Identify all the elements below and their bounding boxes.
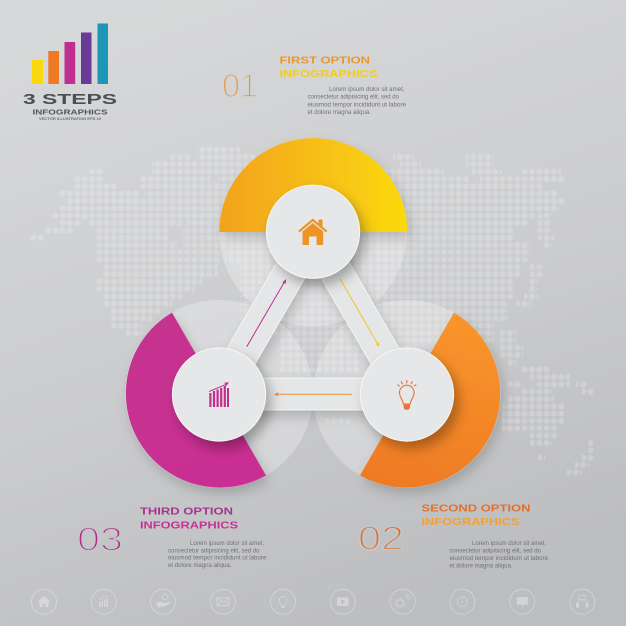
icon: banknote bbox=[330, 589, 355, 614]
option 03 text block bbox=[77, 507, 267, 569]
number 01: 01 bbox=[222, 68, 258, 105]
number 03: 03 bbox=[77, 522, 123, 558]
icon: house bbox=[298, 218, 327, 245]
icon: growth chart bbox=[209, 382, 229, 407]
icon: chart outline bbox=[91, 589, 116, 614]
circle node: first bbox=[266, 185, 360, 278]
body text 01: consectetur adipisicing elit, sed do bbox=[308, 94, 399, 100]
triangle connectors bbox=[219, 232, 407, 394]
body text 02: Lorem ipsum dolor sit amet, bbox=[472, 540, 546, 547]
option 02 text block bbox=[358, 504, 548, 570]
body text 03 bbox=[168, 540, 267, 569]
pale backing discs bbox=[125, 138, 501, 488]
body text 01: eiusmod tempor incididunt ut labore bbox=[308, 101, 406, 108]
panel: first option half disc bbox=[219, 138, 407, 232]
body text 02: et dolore magna aliqua. bbox=[450, 562, 513, 570]
circle node: third bbox=[172, 348, 266, 441]
body text 02 bbox=[450, 540, 548, 570]
body text 02: eiusmod tempor incididunt ut labore bbox=[450, 555, 548, 562]
arrow: second to third bbox=[274, 392, 352, 396]
body text 02: consectetur adipisicing elit, sed do bbox=[450, 548, 541, 555]
icon: flow chart bbox=[570, 589, 595, 614]
logo caption: VECTOR ILLUSTRATION EPS 10 bbox=[39, 117, 101, 121]
bottom icon row bbox=[32, 589, 595, 614]
heading third option: THIRD OPTION bbox=[140, 507, 233, 518]
body text 03: consectetur adipisicing elit, sed do bbox=[168, 548, 260, 554]
heading second option: SECOND OPTION bbox=[422, 504, 530, 515]
circle node: second bbox=[360, 348, 454, 441]
heading infographics magenta: INFOGRAPHICS bbox=[140, 520, 238, 531]
body text 01: Lorem ipsum dolor sit amet, bbox=[329, 86, 405, 93]
body text 03: eiusmod tempor incididunt ut labore bbox=[168, 554, 267, 562]
icon: clock bbox=[450, 589, 475, 614]
icon: small bulb bbox=[270, 589, 296, 614]
body text 01 bbox=[308, 86, 406, 116]
dotted world map bbox=[30, 150, 595, 472]
heading infographics orange: INFOGRAPHICS bbox=[422, 517, 520, 528]
icon: gears bbox=[390, 589, 415, 614]
icon: light bulb bbox=[397, 380, 416, 410]
arrow: third to first bbox=[247, 279, 286, 347]
icon: hand with coin bbox=[150, 589, 176, 614]
panel: second option half disc bbox=[360, 313, 500, 487]
panel: third option half disc bbox=[126, 313, 266, 487]
logo: 3 steps bbox=[23, 24, 117, 121]
icon: envelope bbox=[210, 589, 236, 614]
option 01 text block bbox=[222, 56, 406, 116]
arrow: first to second bbox=[340, 279, 380, 347]
heading first option: FIRST OPTION bbox=[280, 56, 370, 66]
logo bar chart bbox=[32, 24, 108, 84]
icon: speech bubble bbox=[510, 589, 535, 614]
logo subtitle: INFOGRAPHICS bbox=[32, 108, 108, 116]
heading infographics yellow: INFOGRAPHICS bbox=[280, 69, 378, 80]
number 02: 02 bbox=[358, 520, 404, 558]
body text 01: et dolore magna aliqua. bbox=[308, 109, 371, 116]
logo title: 3 STEPS bbox=[23, 91, 117, 108]
icon: home outline bbox=[32, 589, 56, 614]
body text 03: et dolore magna aliqua. bbox=[168, 562, 232, 569]
body text 03: Lorem ipsum dolor sit amet, bbox=[190, 540, 264, 547]
